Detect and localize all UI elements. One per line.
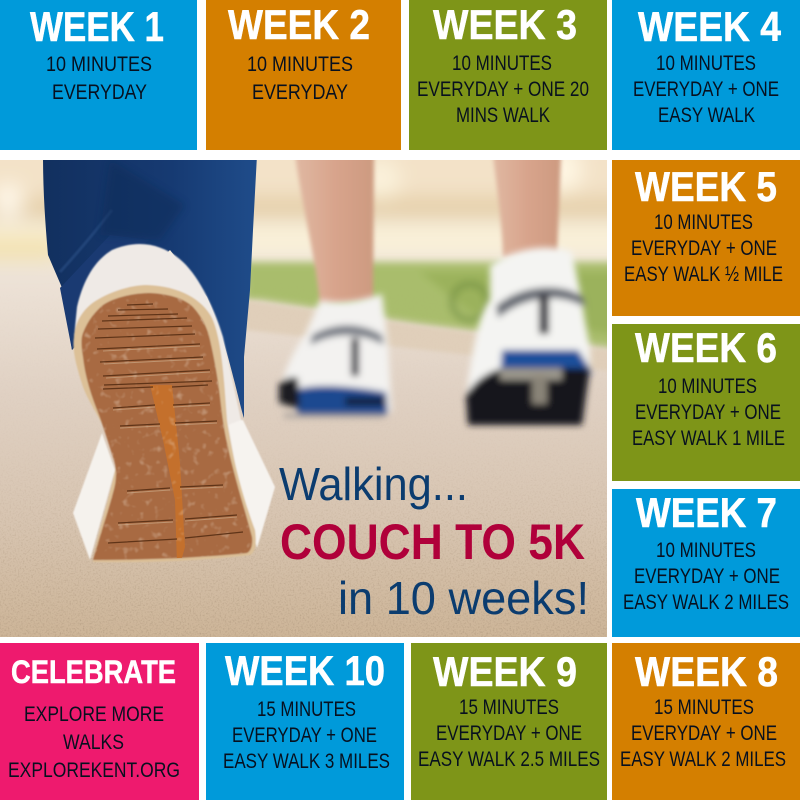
text: week 6 plan — [632, 375, 785, 450]
text: week 4 plan: EASY WALK — [658, 104, 755, 127]
text: week 4 plan: 10 MINUTES — [656, 52, 756, 75]
heading: week 2: WEEK 2 — [228, 1, 370, 48]
text: week 7 plan: 10 MINUTES — [656, 539, 756, 562]
heading: week 10: WEEK 10 — [225, 647, 385, 694]
text: week 8 plan: 15 MINUTES — [654, 696, 754, 719]
text: week 2 plan — [247, 53, 353, 104]
heading: week 6: WEEK 6 — [635, 324, 777, 371]
panel: celebrate — [0, 643, 199, 800]
sole tread — [80, 290, 260, 565]
text: week 2 plan: EVERYDAY — [252, 81, 348, 104]
text: week 1 plan — [46, 53, 152, 104]
text: week 5 plan — [624, 211, 783, 286]
text: week 3 plan — [417, 52, 589, 127]
heading: week 7: WEEK 7 — [636, 489, 777, 536]
text: week 10 plan — [223, 698, 390, 773]
text: week 9 plan: 15 MINUTES — [459, 696, 559, 719]
photo: walking shoes on a path — [0, 160, 607, 637]
panel: week 10 — [206, 643, 404, 800]
blurred leg left — [295, 155, 374, 305]
text: week 3 plan: MINS WALK — [456, 104, 550, 127]
text: week 9 plan: EVERYDAY + ONE — [436, 722, 582, 745]
shoe: rear view with sole — [73, 244, 275, 562]
text: week 9 plan: EASY WALK 2.5 MILES — [418, 748, 600, 771]
heading: week 4: WEEK 4 — [638, 3, 782, 50]
trousers — [43, 155, 257, 418]
heading: week 3: WEEK 3 — [433, 1, 577, 48]
panel: week 4 — [612, 0, 800, 150]
heading: week 9: WEEK 9 — [433, 648, 577, 695]
heading: week 1: WEEK 1 — [30, 3, 164, 50]
text: week 10 plan: EVERYDAY + ONE — [232, 724, 377, 747]
title line 2: COUCH TO 5K — [280, 514, 585, 570]
text: week 1 plan: 10 MINUTES — [46, 53, 152, 76]
title line 3: in 10 weeks! — [338, 572, 589, 624]
text: week 1 plan: EVERYDAY — [52, 81, 147, 104]
blurred background — [0, 160, 607, 370]
text: explore more walks: EXPLORE MORE — [24, 703, 164, 726]
panel: week 2 — [206, 0, 401, 150]
blurred shoe left — [279, 294, 392, 418]
text: explore more walks — [8, 703, 180, 782]
text: explore more walks: WALKS — [63, 731, 124, 754]
panel: week 5 — [612, 160, 800, 316]
panel: week 7 — [612, 489, 800, 637]
text: week 3 plan: EVERYDAY + ONE 20 — [417, 78, 589, 101]
text: week 3 plan: 10 MINUTES — [452, 52, 552, 75]
text: week 10 plan: 15 MINUTES — [257, 698, 356, 721]
ground texture — [0, 477, 607, 637]
panel: week 1 — [0, 0, 197, 150]
blurred leg right — [493, 155, 561, 258]
panel: week 8 — [612, 643, 800, 800]
panel: week 9 — [411, 643, 607, 800]
text: week 8 plan — [620, 696, 786, 771]
text: week 4 plan — [633, 52, 779, 127]
text: week 9 plan — [418, 696, 600, 771]
text: week 7 plan — [623, 539, 789, 614]
blurred shoe right — [466, 248, 592, 425]
text: explore more walks: EXPLOREKENT.ORG — [8, 759, 180, 782]
title line 1: Walking... — [279, 458, 468, 510]
text: week 10 plan: EASY WALK 3 MILES — [223, 750, 390, 773]
panel: week 6 — [612, 324, 800, 481]
heading: celebrate: CELEBRATE — [11, 654, 176, 690]
title: walking couch to 5k — [279, 458, 589, 624]
heading: week 5: WEEK 5 — [635, 163, 777, 210]
panel: week 3 — [409, 0, 607, 150]
text: week 2 plan: 10 MINUTES — [247, 53, 353, 76]
text: week 6 plan: 10 MINUTES — [658, 375, 757, 398]
text: week 5 plan: 10 MINUTES — [654, 211, 753, 234]
heading: week 8: WEEK 8 — [635, 648, 778, 695]
